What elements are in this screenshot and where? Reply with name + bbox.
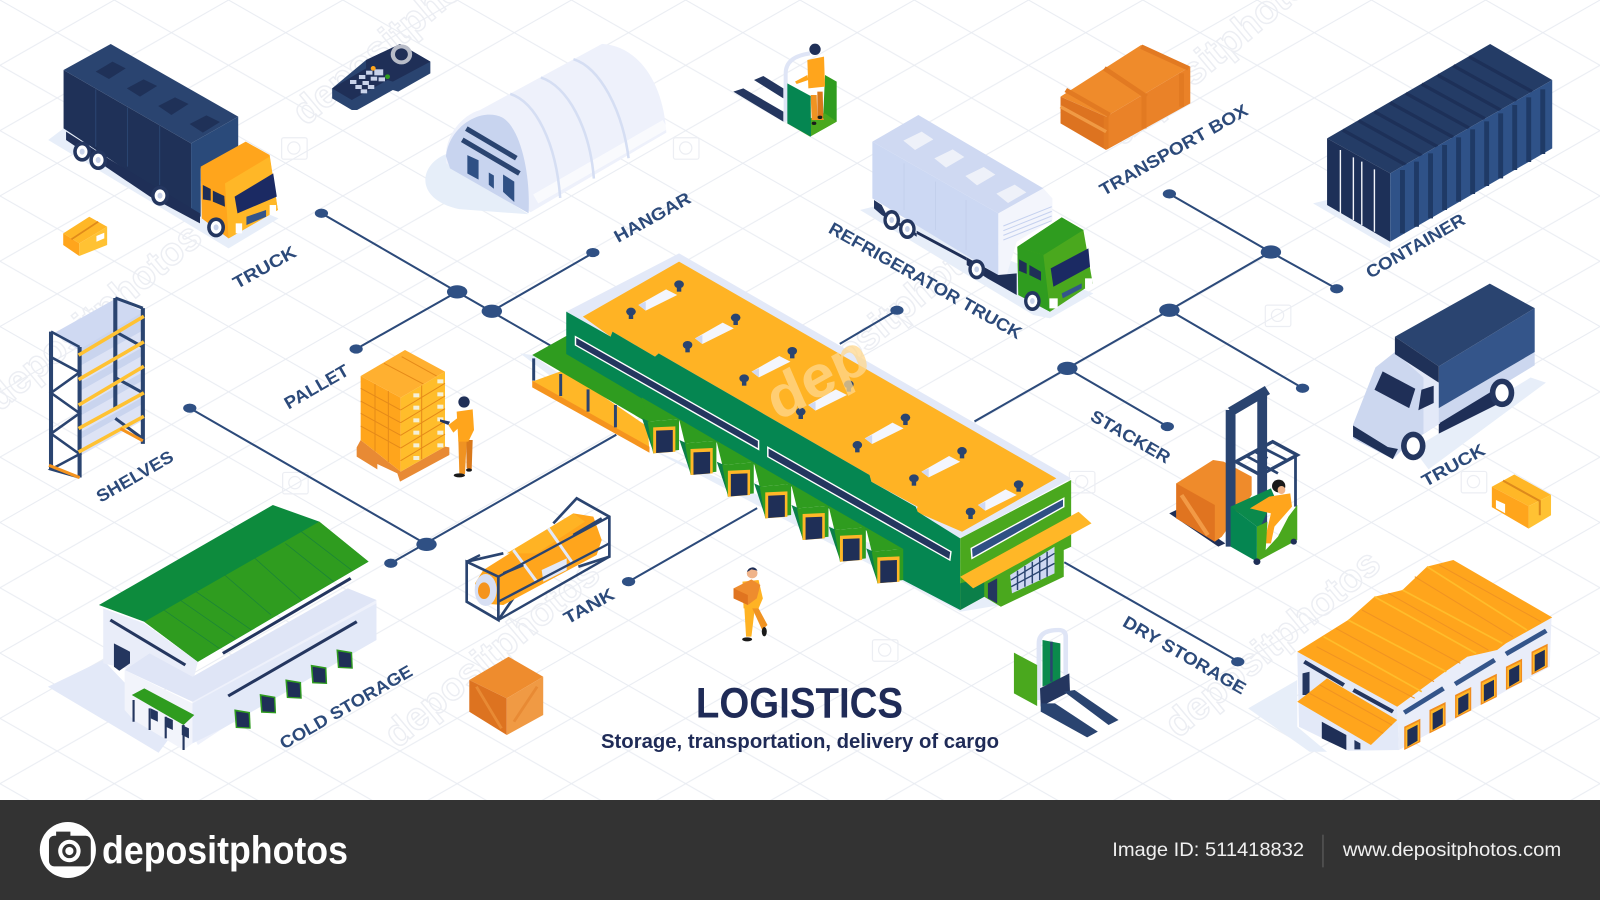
- label: stacker: STACKER: [1087, 406, 1174, 468]
- warehouse shelves: [54, 298, 144, 457]
- label: dry storage: DRY STORAGE: [1120, 612, 1250, 698]
- gable roof: [1297, 560, 1552, 707]
- image id: Image ID: 511418832: [1112, 839, 1304, 861]
- footer bar: [0, 800, 1600, 900]
- refrigerator truck: [860, 115, 1093, 318]
- watermarks: [0, 0, 1487, 756]
- shipping container: [1313, 44, 1552, 248]
- label: container: CONTAINER: [1362, 209, 1469, 282]
- watermarks: depositphotos: [774, 215, 1006, 419]
- subtitle: Storage, transportation, delivery of cargo: [601, 731, 999, 753]
- main warehouse building: roof, dock doors, front entrance: [520, 253, 1091, 612]
- watermarks: depositphotos: [376, 551, 608, 756]
- watermarks: depositphotos: [1156, 541, 1389, 746]
- footer logo: depositphotos: [102, 829, 348, 872]
- truck, right: [1353, 284, 1546, 469]
- dock doors: [642, 397, 903, 583]
- loading platform: [532, 336, 679, 453]
- transport box: [1061, 45, 1190, 150]
- footer logo: [40, 822, 348, 878]
- long front wall: [566, 312, 960, 610]
- label: cold storage: COLD STORAGE: [276, 661, 416, 753]
- connector network: [183, 189, 1343, 666]
- warehouse roof: [566, 253, 1071, 538]
- label: truck: TRUCK: [229, 241, 300, 293]
- website: www.depositphotos.com: [1342, 839, 1561, 861]
- worker carrying a box: [734, 567, 768, 641]
- small parcel, top left: [63, 217, 107, 256]
- warehouse roof: dep: [750, 324, 882, 431]
- forklift stacker with driver: [1169, 390, 1297, 565]
- tank in frame: [467, 498, 609, 620]
- wooden crate: [469, 657, 543, 735]
- label: pallet: PALLET: [280, 360, 353, 413]
- label: shelves: SHELVES: [93, 446, 177, 507]
- handheld scanner: [332, 44, 430, 110]
- worker with scanner: [440, 396, 474, 477]
- small parcel, right: [1492, 474, 1551, 529]
- dry storage building: [1248, 560, 1552, 752]
- walls: [1297, 617, 1552, 751]
- front entrance: [960, 480, 1091, 610]
- pedal stacker, bottom: [1014, 630, 1119, 737]
- label: refrigerator truck: REFRIGERATOR TRUCK: [825, 218, 1026, 343]
- pallet stacker with operator: [733, 44, 837, 137]
- shelves frame and beams: [49, 298, 144, 478]
- label: hangar: HANGAR: [610, 188, 695, 246]
- pallet with cardboard boxes: [357, 350, 449, 482]
- hangar: [425, 44, 666, 214]
- title: LOGISTICS: [696, 679, 903, 727]
- label: tank: TANK: [560, 584, 618, 628]
- label: transport box: TRANSPORT BOX: [1096, 100, 1252, 200]
- cold storage building: [48, 505, 376, 753]
- truck, top left: [48, 44, 279, 248]
- label: truck right: TRUCK: [1418, 439, 1489, 491]
